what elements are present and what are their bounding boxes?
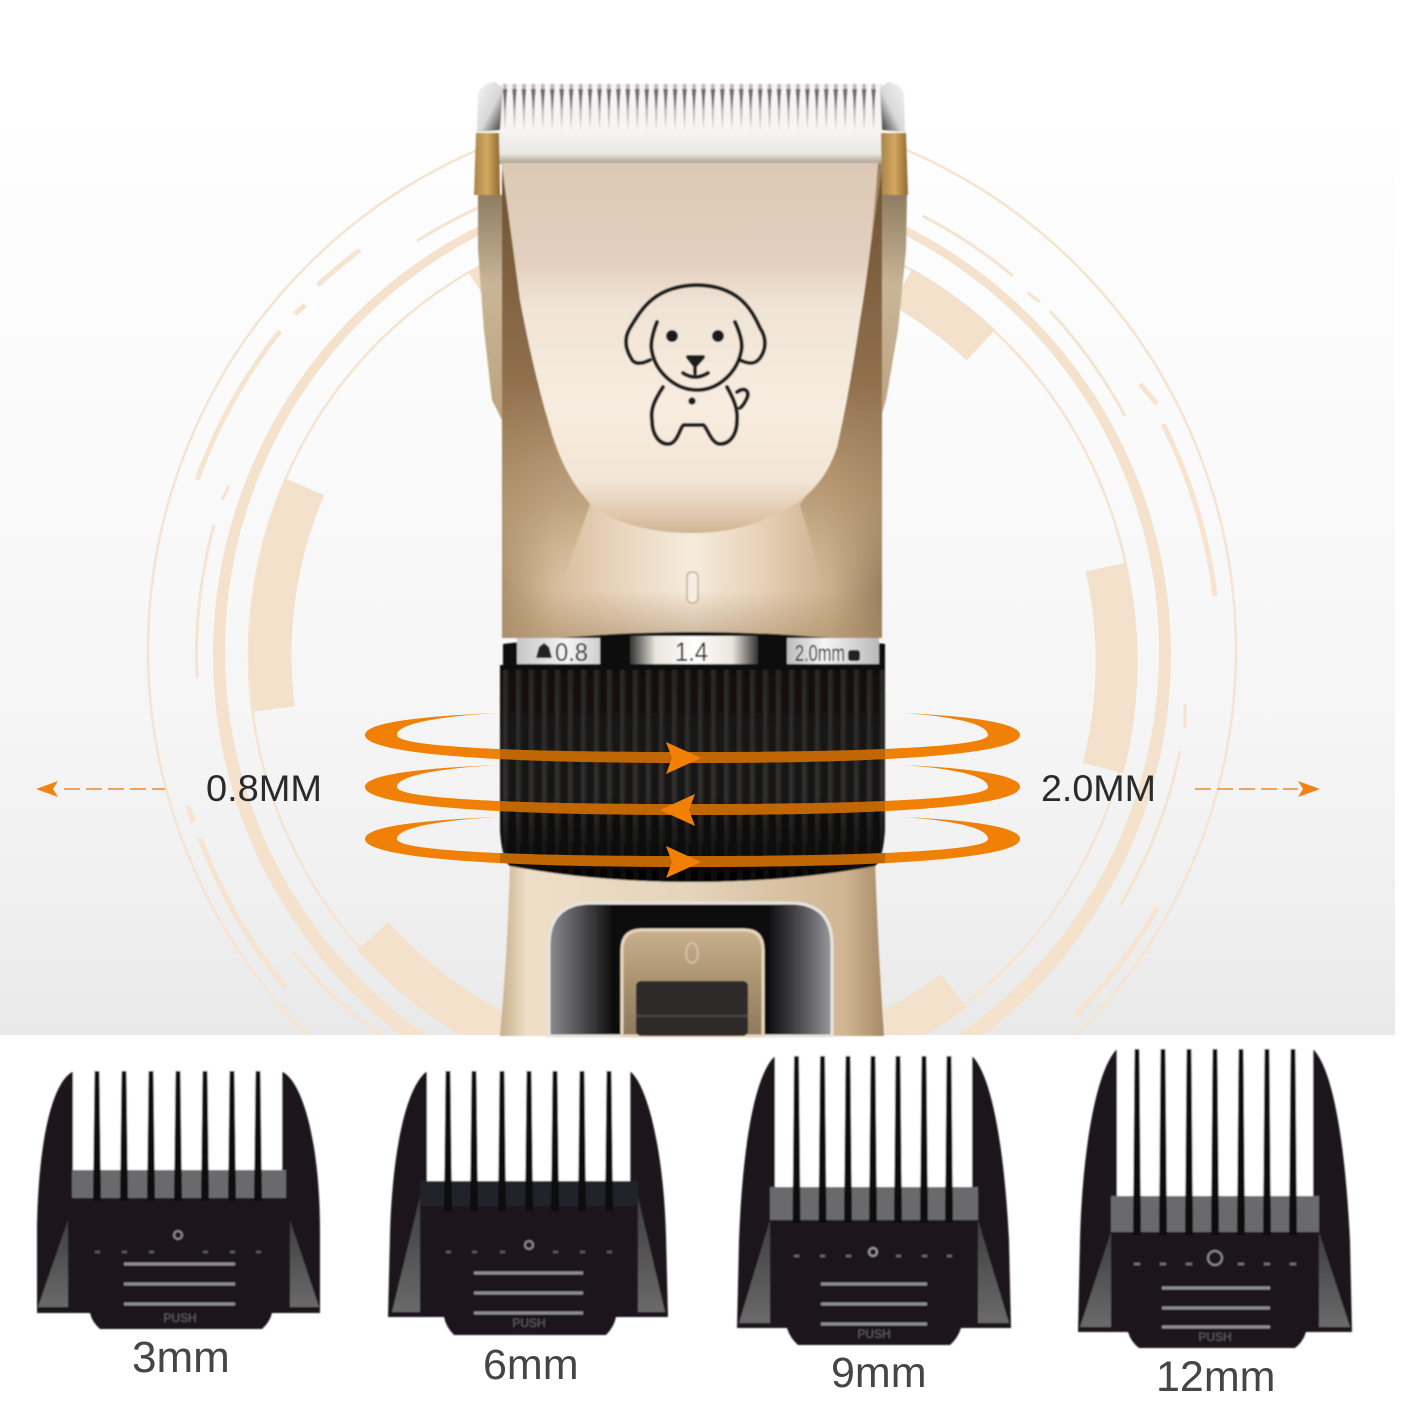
button grip (636, 981, 748, 1036)
ring bands (365, 713, 1020, 867)
label: 0.8MM: 0.8MM (206, 768, 322, 809)
comb label: 12mm: 12mm (1156, 1353, 1275, 1401)
switch panel (549, 903, 832, 1036)
clipper (474, 82, 908, 1036)
blade teeth (500, 84, 882, 130)
icon: dog logo (626, 285, 765, 444)
scale ring (503, 632, 885, 670)
comb label: 6mm: 6mm (483, 1341, 579, 1389)
blade corner right (880, 82, 905, 132)
arrow: left dashed (36, 781, 165, 797)
comb mark: PUSH (857, 1327, 891, 1341)
comb: 6mm (388, 1060, 668, 1335)
arrowhead bottom (666, 846, 701, 878)
scale value 2.0mm: 2.0mm (795, 640, 845, 666)
scale value 1.4: 1.4 (675, 637, 708, 667)
comb: 12mm (1078, 1040, 1352, 1348)
comb mark: PUSH (512, 1316, 546, 1330)
adjustment dial (500, 665, 885, 882)
gold pin right (881, 133, 908, 195)
button marker (686, 943, 698, 963)
gold pin left (474, 133, 500, 195)
body shadow right (800, 170, 882, 590)
arrowhead middle (660, 794, 695, 826)
clipper upper body (502, 158, 882, 638)
arrowhead top (666, 742, 701, 774)
blade corner left (477, 82, 503, 132)
blade guard (498, 130, 882, 164)
status indicator (687, 572, 698, 603)
label: 2.0MM: 2.0MM (1041, 768, 1156, 809)
comb mark: PUSH (1198, 1330, 1232, 1344)
scale value 0.8: 0.8 (555, 639, 588, 667)
lower clipper body (500, 860, 884, 1036)
concentric technology rings (146, 148, 1238, 1035)
side latch right (880, 195, 907, 420)
arrow: right dashed (1195, 781, 1320, 797)
comb: 9mm (737, 1045, 1011, 1345)
body shade above scale ring (502, 590, 882, 638)
slide button (622, 930, 763, 1036)
comb label: 9mm: 9mm (831, 1349, 927, 1397)
comb mark: PUSH (163, 1311, 197, 1325)
comb: 3mm (37, 1060, 320, 1329)
rotation arrows (365, 700, 1020, 880)
comb label: 3mm: 3mm (132, 1333, 230, 1382)
clipper head plate (502, 163, 878, 533)
body shadow left (502, 170, 590, 590)
background panel (0, 130, 1395, 1035)
side latch left (478, 195, 502, 420)
